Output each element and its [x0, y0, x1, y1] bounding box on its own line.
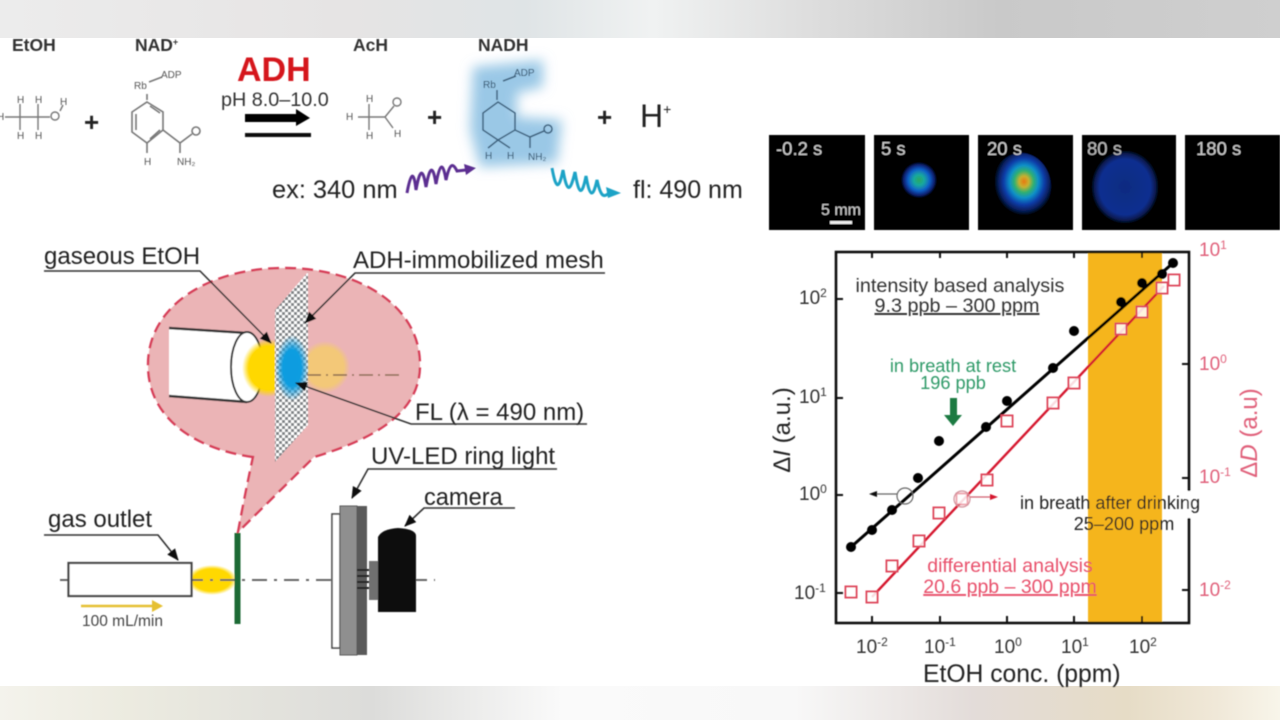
x axis tick labels: 2 — [1150, 635, 1157, 649]
label: camera: camera — [424, 485, 504, 511]
x axis tick labels: 10 — [856, 637, 877, 658]
right axis tick labels: 10 — [1199, 354, 1220, 375]
right axis tick labels — [1199, 238, 1231, 601]
annotation: differential analysis: differential analysis — [927, 555, 1093, 577]
wave: fluorescence teal — [552, 168, 621, 198]
molecule: EtOH: EtOH — [12, 35, 56, 55]
right axis title: ΔD (a.u) — [1236, 388, 1263, 478]
molecule: EtOH: H — [35, 131, 42, 142]
differential data points — [846, 274, 1180, 602]
breath after drinking band — [1088, 252, 1162, 623]
excitation label: ex: 340 nm — [272, 176, 398, 204]
orange glow behind mesh — [308, 342, 349, 392]
mesh — [275, 272, 308, 462]
flow rate label: 100 mL/min — [82, 613, 163, 630]
annotation: breath after drinking: in breath after drinking — [1020, 493, 1200, 513]
beam axis in bubble — [307, 374, 400, 376]
label: FL wavelength — [296, 383, 587, 426]
image: 5 s — [874, 135, 969, 230]
magnified bubble — [148, 268, 420, 532]
mesh holder — [234, 533, 240, 624]
enzyme label: ADH: ADH — [237, 51, 311, 89]
frame gap behind annotation — [1186, 491, 1192, 518]
proton label: + — [663, 101, 671, 117]
flow arrow — [81, 600, 163, 612]
image: 180 s — [1185, 135, 1280, 230]
x axis tick labels: 10 — [924, 637, 945, 658]
right axis tick labels: -1 — [1220, 465, 1231, 479]
wave: excitation purple — [407, 164, 476, 193]
label: gaseous EtOH: gaseous EtOH — [44, 243, 200, 270]
right axis tick labels: 1 — [1220, 238, 1227, 252]
molecule: NAD+: Rb — [134, 81, 147, 92]
molecule: EtOH: H — [17, 95, 24, 106]
proton label: H — [640, 98, 663, 134]
ethanol plume — [242, 339, 276, 397]
image: -0.2 s — [769, 135, 865, 230]
outlet plume — [187, 565, 237, 595]
label: ADH-immobilized mesh: ADH-immobilized mesh — [353, 247, 604, 274]
fluorescence label: fl: 490 nm — [633, 176, 743, 204]
annotation: breath after drinking: 25–200 ppm — [1074, 514, 1174, 534]
molecule: NADH: H — [507, 151, 514, 162]
gas outlet tube — [68, 563, 192, 596]
gas tube — [169, 328, 263, 402]
molecule: EtOH — [0, 35, 67, 142]
left axis tick labels: 0 — [820, 482, 827, 496]
arrow: forward reaction — [245, 109, 310, 126]
label: gas outlet — [44, 506, 178, 560]
molecule: EtOH: H — [60, 97, 67, 108]
NADH blue glow — [470, 60, 562, 167]
image: -0.2 s: -0.2 s — [776, 138, 822, 159]
left axis tick labels: 2 — [820, 286, 827, 300]
centre axis — [60, 579, 435, 581]
right axis tick labels: 0 — [1220, 352, 1227, 366]
molecule: AcH — [346, 35, 401, 142]
molecule: NADH: NH₂ — [528, 152, 546, 163]
annotation: breath at rest — [890, 356, 1016, 393]
left axis tick labels — [794, 286, 827, 604]
molecule: NADH: Rb — [483, 80, 496, 91]
top background band — [0, 0, 1280, 38]
molecule: NAD+: ADP — [161, 70, 182, 81]
x axis tick labels: -2 — [877, 635, 888, 649]
annotation: breath at rest: in breath at rest — [890, 356, 1016, 376]
left axis title: ΔI (a.u.) — [769, 387, 796, 473]
x axis tick labels: 1 — [1082, 635, 1089, 649]
right axis tick labels: -2 — [1220, 578, 1231, 592]
annotation: breath at rest: 196 ppb — [920, 373, 986, 393]
annotation: intensity analysis: 9.3 ppb – 300 ppm — [875, 295, 1039, 317]
right axis tick labels: 10 — [1199, 240, 1220, 261]
annotation: intensity analysis: intensity based analysis — [856, 275, 1065, 297]
image: 20 s — [978, 135, 1073, 230]
bottom background band — [0, 686, 1280, 720]
molecule: AcH: H — [394, 129, 401, 140]
x axis tick labels: 0 — [1015, 635, 1022, 649]
image: 80 s — [1082, 135, 1176, 230]
image: 80 s: 80 s — [1087, 138, 1122, 159]
left axis tick labels: -1 — [815, 581, 826, 595]
molecule: AcH: H — [366, 94, 373, 105]
arrow: reverse reaction — [245, 133, 311, 137]
left axis tick labels: 10 — [794, 583, 815, 604]
label: gas outlet: gas outlet — [48, 506, 152, 533]
molecule: EtOH: H — [17, 131, 24, 142]
arrow: breath at rest — [944, 398, 962, 426]
plot frame and ticks — [836, 252, 1189, 623]
annotation: intensity analysis — [856, 275, 1065, 317]
chart: EtOH concentration log-log plot — [769, 238, 1263, 688]
image: 180 s: 180 s — [1196, 138, 1241, 159]
camera body — [369, 528, 416, 612]
molecule: EtOH: H — [35, 95, 42, 106]
molecule: AcH: H — [366, 131, 373, 142]
annotation: breath after drinking — [1020, 493, 1200, 534]
molecule: NAD+: NAD — [135, 35, 173, 55]
image: 5 s: 5 s — [881, 138, 906, 159]
axis pointer: left axis — [869, 488, 913, 504]
molecule: NADH — [478, 35, 552, 163]
left axis tick labels: 1 — [820, 385, 827, 399]
pH condition: pH 8.0–10.0 — [221, 89, 329, 111]
label: camera — [405, 485, 515, 526]
label: gaseous EtOH — [44, 243, 271, 343]
right axis tick labels: 10 — [1199, 467, 1220, 488]
left axis tick labels: 10 — [799, 484, 820, 505]
x axis tick labels: -1 — [945, 635, 956, 649]
x axis tick labels — [856, 635, 1157, 658]
molecule: NAD+: H — [144, 157, 151, 168]
time-lapse fluorescence images — [769, 135, 1280, 230]
image: 20 s: 20 s — [987, 138, 1022, 159]
label: UV-LED ring light: UV-LED ring light — [371, 443, 555, 470]
plus sign: + — [84, 107, 99, 137]
x axis title: EtOH conc. (ppm) — [923, 661, 1121, 688]
molecule: NADH: ADP — [514, 68, 535, 79]
label: ADH-immobilized mesh — [305, 247, 605, 323]
annotation: differential analysis: 20.6 ppb – 300 ppm — [923, 576, 1097, 598]
image: -0.2 s: 5 mm — [821, 202, 861, 219]
label: FL wavelength: FL (λ = 490 nm) — [415, 399, 584, 426]
molecule: AcH: H — [346, 112, 353, 123]
molecule: NADH: NADH — [478, 35, 529, 55]
reaction scheme — [0, 35, 743, 204]
molecule: AcH: AcH — [353, 35, 388, 55]
x axis tick labels: 10 — [994, 637, 1015, 658]
left axis tick labels: 10 — [799, 288, 820, 309]
intensity fit line — [851, 263, 1173, 547]
left axis tick labels: 10 — [799, 387, 820, 408]
molecule: NAD+: NH₂ — [177, 157, 195, 168]
differential fit line — [872, 286, 1164, 597]
axis pointer: right axis — [954, 491, 998, 507]
molecule: NAD+ — [132, 35, 200, 168]
UV-LED ring light — [332, 506, 369, 655]
intensity data points — [846, 258, 1178, 552]
x axis tick labels: 10 — [1061, 637, 1082, 658]
fluorescence spot — [275, 335, 309, 401]
plus sign: + — [427, 102, 442, 132]
plus sign: + — [597, 102, 612, 132]
x axis tick labels: 10 — [1129, 637, 1150, 658]
label: UV-LED ring light — [352, 443, 557, 498]
annotation: differential analysis — [923, 555, 1097, 598]
molecule: NAD+: + — [173, 37, 178, 47]
diagram: optical setup — [44, 243, 605, 655]
molecule: NADH: H — [485, 151, 492, 162]
right axis tick labels: 10 — [1199, 580, 1220, 601]
